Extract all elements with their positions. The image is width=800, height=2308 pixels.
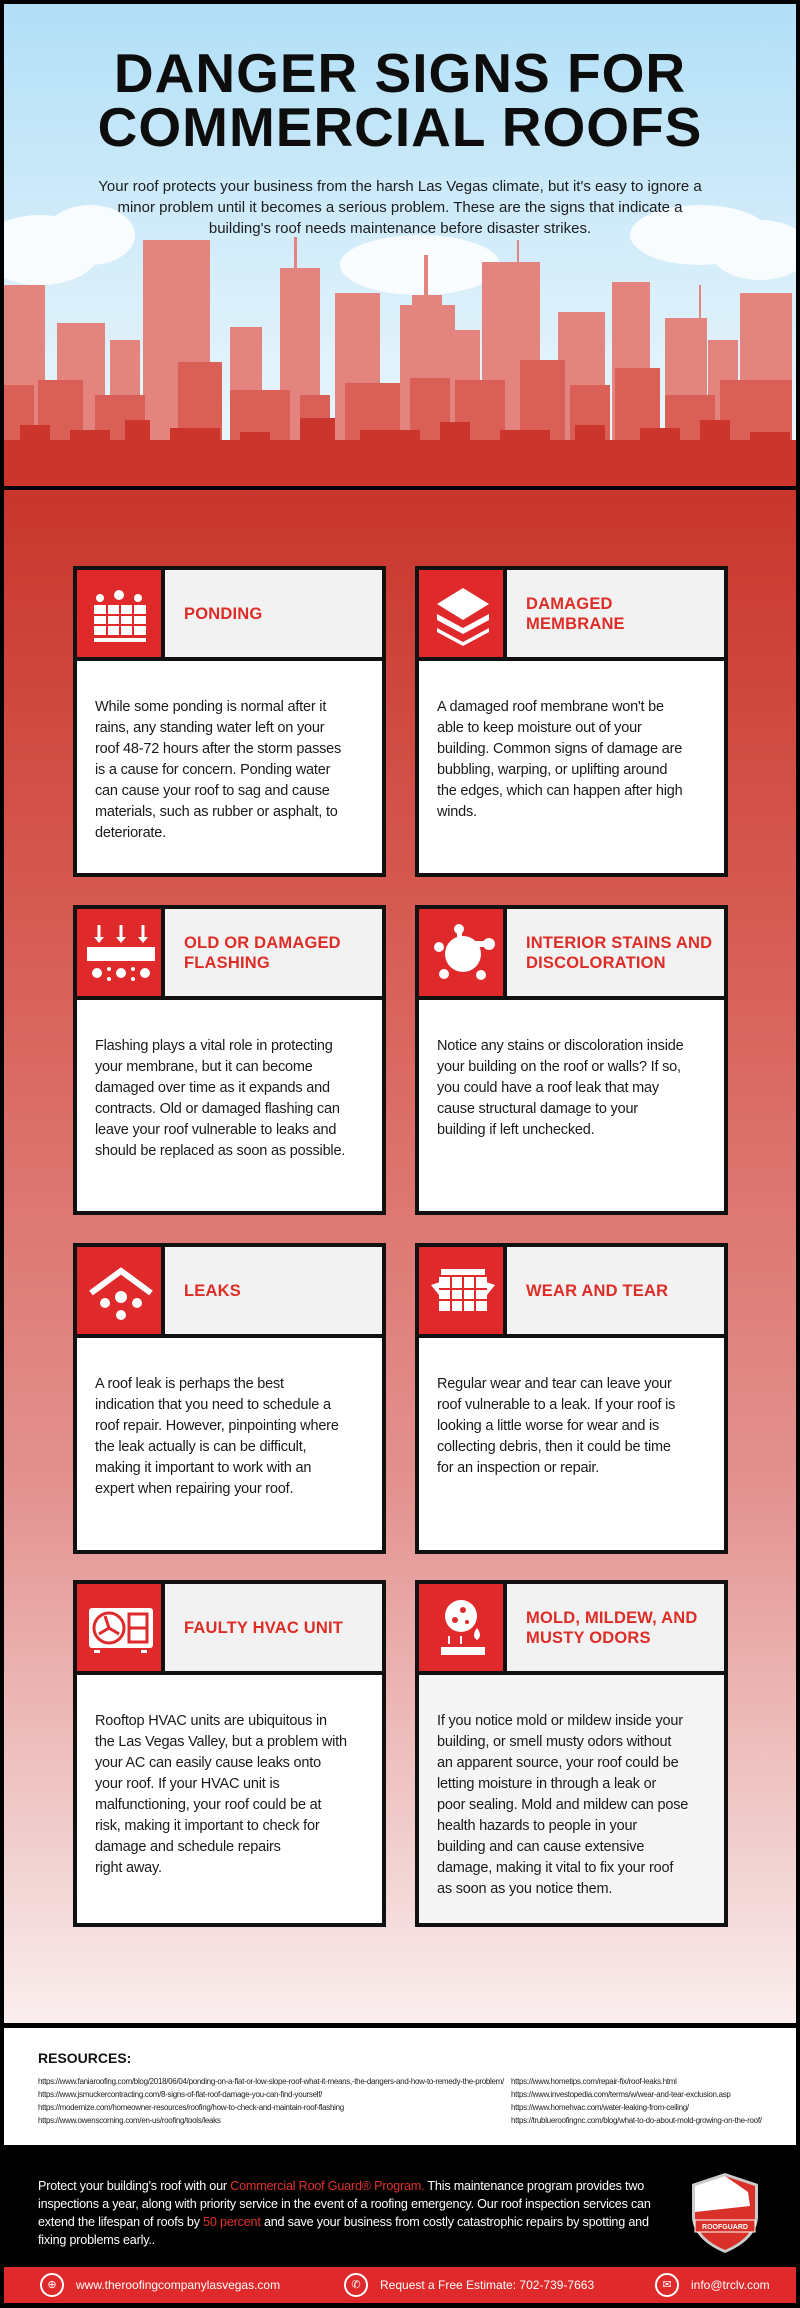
- card: flashing: your membrane, but it can become: [95, 1059, 313, 1075]
- footer promo text: inspections a year, along with priority service in the event of a roofing emergency. Our roof inspection services can: [38, 2197, 651, 2211]
- card: hvac: damage and schedule repairs: [95, 1839, 281, 1855]
- card: damaged membrane: MEMBRANE: [526, 614, 625, 632]
- card: mold: MUSTY ODORS: [526, 1628, 651, 1646]
- roofguard shield logo: [692, 2173, 758, 2253]
- icon: mold: [419, 1584, 507, 1671]
- card: mold: poor sealing. Mold and mildew can pose: [437, 1797, 688, 1813]
- footer promo text: Protect your building's roof with our Commercial Roof Guard® Program. This maintenance program provides two: [38, 2179, 644, 2193]
- card: wear and tear: for an inspection or repair.: [437, 1460, 599, 1476]
- icon: wear and tear: [419, 1247, 507, 1334]
- contact: phone: [344, 2273, 594, 2297]
- resource links left: https://www.faniaroofing.com/blog/2018/06/04/ponding-on-a-flat-or-low-slope-roof-what-it-means,-the-dangers-and-how-to-remedy-the-problem/: [38, 2077, 504, 2086]
- contact: website: ⊕: [47, 2279, 57, 2291]
- card: damaged membrane: DAMAGED: [526, 594, 613, 612]
- card: hvac: right away.: [95, 1860, 162, 1876]
- title: DANGER SIGNS FOR: [114, 42, 686, 104]
- card: wear and tear: Regular wear and tear can leave your: [437, 1376, 672, 1392]
- title: [98, 42, 702, 158]
- card: damaged membrane: the edges, which can happen after high: [437, 783, 683, 799]
- card: damaged membrane: able to keep moisture out of your: [437, 720, 642, 736]
- card: wear and tear: looking a little worse for wear and is: [437, 1418, 659, 1434]
- card: mold: an apparent source, your roof could be: [437, 1755, 678, 1771]
- card: ponding: rains, any standing water left on your: [95, 720, 324, 736]
- contact: phone: ✆: [351, 2279, 361, 2291]
- card: mold: as soon as you notice them.: [437, 1881, 612, 1897]
- resources heading: RESOURCES:: [38, 2050, 131, 2066]
- card: flashing: damaged over time as it expands and: [95, 1080, 330, 1096]
- intro text: minor problem until it becomes a serious problem. These are the signs that indicate a: [117, 199, 682, 216]
- resource links right: https://www.hometips.com/repair-fix/roof-leaks.html: [511, 2077, 677, 2086]
- contact: website: www.theroofingcompanylasvegas.com: [76, 2278, 280, 2292]
- card: wear and tear: roof vulnerable to a leak. If your roof is: [437, 1397, 675, 1413]
- card: leaks: expert when repairing your roof.: [95, 1481, 293, 1497]
- icon: stain splat: [419, 909, 507, 996]
- card: leaks: LEAKS: [184, 1282, 241, 1300]
- card: ponding: While some ponding is normal after it: [95, 699, 326, 715]
- card: interior stains: you could have a roof leak that may: [437, 1080, 659, 1096]
- intro text: Your roof protects your business from the harsh Las Vegas climate, but it's easy to ignore a: [98, 178, 702, 195]
- card: mold: letting moisture in through a leak or: [437, 1776, 656, 1792]
- footer promo text: extend the lifespan of roofs by 50 percent and save your business from costly catastrophic repairs by spotting and: [38, 2215, 649, 2229]
- card: ponding: deteriorate.: [95, 825, 166, 841]
- icon: flashing: [77, 909, 165, 996]
- card: wear and tear: collecting debris, then it could be time: [437, 1439, 671, 1455]
- card: interior stains: your building on the roof or walls? If so,: [437, 1059, 681, 1075]
- card: mold: damage, making it vital to fix your roof: [437, 1860, 673, 1876]
- card: hvac: the Las Vegas Valley, but a problem with: [95, 1734, 347, 1750]
- intro text: [98, 178, 702, 237]
- resources panel: [4, 2028, 796, 2145]
- card: ponding: materials, such as rubber or asphalt, to: [95, 804, 338, 820]
- card: mold: MOLD, MILDEW, AND: [526, 1608, 697, 1626]
- footer promo text: fixing problems early..: [38, 2233, 155, 2247]
- footer promo text: [38, 2179, 651, 2247]
- contact: email: [655, 2273, 770, 2297]
- resource links right: https://trublueroofingnc.com/blog/what-to-do-about-mold-growing-on-the-roof/: [511, 2116, 762, 2125]
- card: hvac: your AC can easily cause leaks onto: [95, 1755, 321, 1771]
- card: leaks: roof repair. However, pinpointing where: [95, 1418, 339, 1434]
- card: hvac: FAULTY HVAC UNIT: [184, 1618, 343, 1636]
- contact: email: ✉: [662, 2279, 672, 2291]
- card: mold: [415, 1580, 728, 1927]
- card: damaged membrane: building. Common signs of damage are: [437, 741, 682, 757]
- card: interior stains: DISCOLORATION: [526, 954, 666, 972]
- card: flashing: [73, 905, 386, 1215]
- card: mold: If you notice mold or mildew inside your: [437, 1713, 683, 1729]
- card: damaged membrane: winds.: [437, 804, 477, 820]
- resource links left: [38, 2077, 504, 2125]
- card: damaged membrane: [415, 566, 728, 877]
- resource links right: [511, 2077, 762, 2125]
- card: hvac: malfunctioning, your roof could be at: [95, 1797, 321, 1813]
- card: hvac: your roof. If your HVAC unit is: [95, 1776, 280, 1792]
- card: interior stains: Notice any stains or discoloration inside: [437, 1038, 684, 1054]
- card: ponding: PONDING: [184, 604, 262, 622]
- card: wear and tear: WEAR AND TEAR: [526, 1282, 668, 1300]
- card: leaks: [73, 1243, 386, 1554]
- card: damaged membrane: bubbling, warping, or uplifting around: [437, 762, 667, 778]
- header sky panel: [4, 4, 796, 486]
- skyline illustration: [4, 205, 796, 486]
- icon: ponding: [77, 570, 165, 657]
- card: leaks: making it important to work with an: [95, 1460, 311, 1476]
- card: ponding: [73, 566, 386, 877]
- card: ponding: can cause your roof to sag and cause: [95, 783, 330, 799]
- roofguard shield logo: ROOFGUARD: [702, 2224, 748, 2231]
- card: hvac: [73, 1580, 386, 1927]
- card: flashing: Flashing plays a vital role in protecting: [95, 1038, 333, 1054]
- intro text: building's roof needs maintenance before disaster strikes.: [209, 220, 591, 237]
- card: leaks: the leak actually is can be difficult,: [95, 1439, 306, 1455]
- resource links left: https://www.jsmuckercontracting.com/8-signs-of-flat-roof-damage-you-can-find-yourself/: [38, 2090, 322, 2099]
- card: mold: health hazards to people in your: [437, 1818, 637, 1834]
- card: flashing: contracts. Old or damaged flashing can: [95, 1101, 340, 1117]
- icon: leaks: [77, 1247, 165, 1334]
- card: mold: building and can cause extensive: [437, 1839, 644, 1855]
- main red section: [4, 490, 796, 2023]
- icon: membrane layers: [419, 570, 507, 657]
- contact: email: info@trclv.com: [691, 2278, 770, 2292]
- card: hvac: risk, making it important to check for: [95, 1818, 319, 1834]
- card: hvac: Rooftop HVAC units are ubiquitous in: [95, 1713, 327, 1729]
- card: flashing: should be replaced as soon as possible.: [95, 1143, 345, 1159]
- resource links left: https://www.owenscorning.com/en-us/roofing/tools/leaks: [38, 2116, 221, 2125]
- card: leaks: A roof leak is perhaps the best: [95, 1376, 284, 1392]
- card: flashing: leave your roof vulnerable to leaks and: [95, 1122, 336, 1138]
- resource links left: https://modernize.com/homeowner-resources/roofing/how-to-check-and-maintain-roof-flashing: [38, 2103, 344, 2112]
- card: damaged membrane: A damaged roof membrane won't be: [437, 699, 664, 715]
- card: leaks: indication that you need to schedule a: [95, 1397, 331, 1413]
- card: wear and tear: [415, 1243, 728, 1554]
- contact: phone: Request a Free Estimate: 702-739-7663: [380, 2278, 594, 2292]
- resource links right: https://www.homehvac.com/water-leaking-from-ceiling/: [511, 2103, 689, 2112]
- card: mold: building, or smell musty odors without: [437, 1734, 671, 1750]
- card: flashing: OLD OR DAMAGED: [184, 934, 341, 952]
- card: flashing: FLASHING: [184, 954, 270, 972]
- card: ponding: roof 48-72 hours after the storm passes: [95, 741, 341, 757]
- contact: website: [40, 2273, 280, 2297]
- card: interior stains: [415, 905, 728, 1215]
- card: interior stains: cause structural damage to your: [437, 1101, 638, 1117]
- contact bar: [4, 2267, 796, 2303]
- card: interior stains: INTERIOR STAINS AND: [526, 934, 712, 952]
- card: interior stains: building if left unchecked.: [437, 1122, 594, 1138]
- title: COMMERCIAL ROOFS: [98, 96, 702, 158]
- icon: hvac unit: [77, 1584, 165, 1671]
- card: ponding: is a cause for concern. Ponding water: [95, 762, 330, 778]
- resource links right: https://www.investopedia.com/terms/w/wear-and-tear-exclusion.asp: [511, 2090, 731, 2099]
